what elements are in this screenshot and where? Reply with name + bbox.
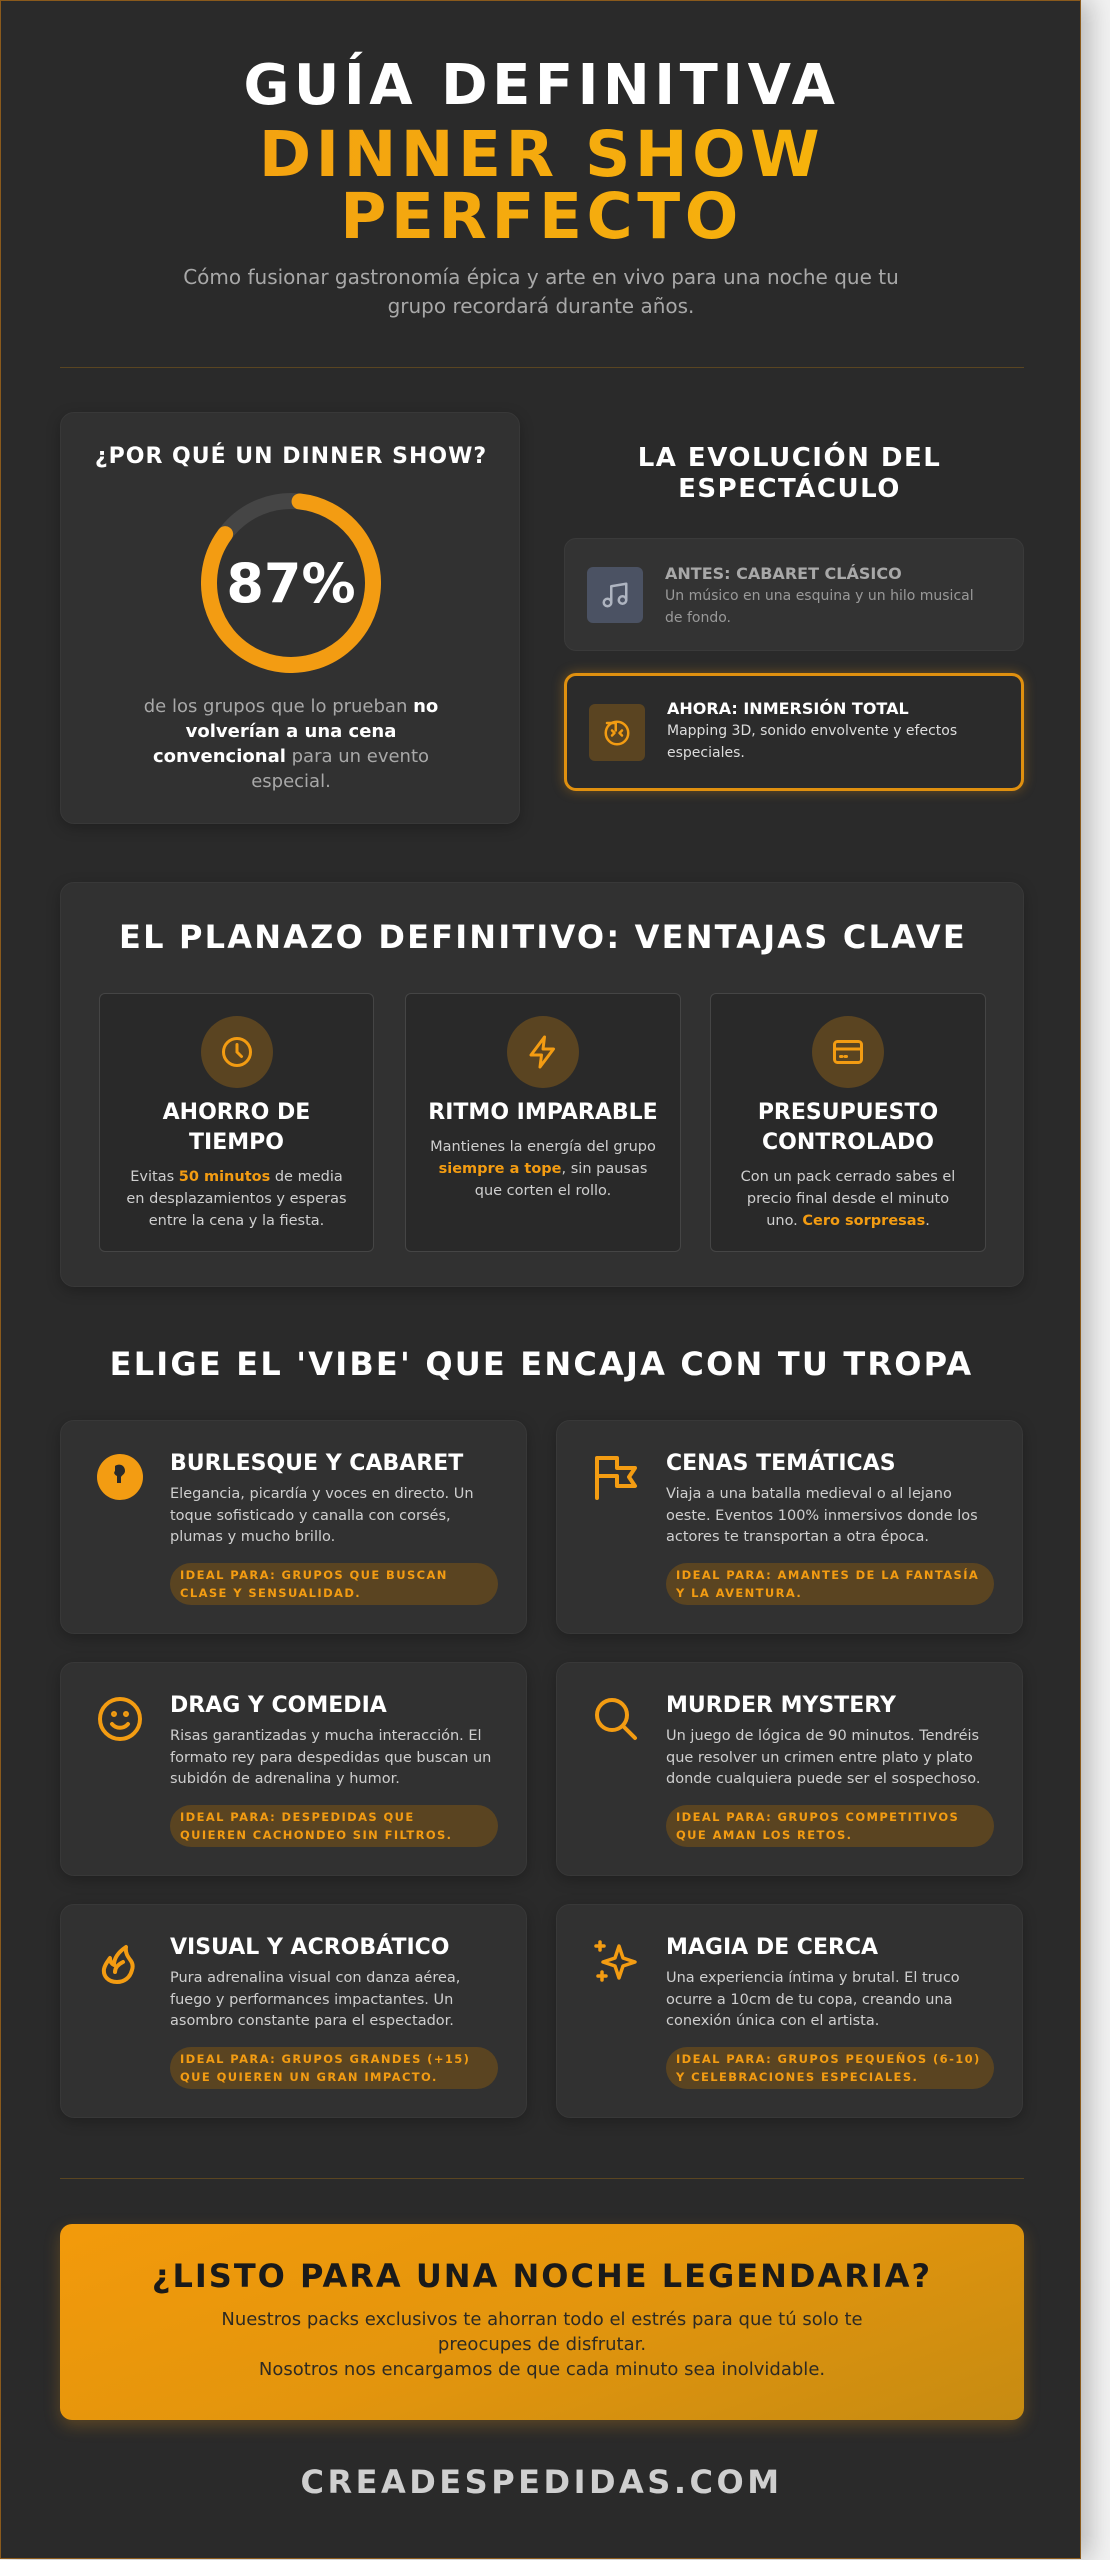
card: drag y comedia bbox=[60, 1662, 527, 1876]
pill: ideal para: IDEAL PARA: GRUPOS COMPETITIVOS bbox=[676, 1810, 959, 1824]
icon: theater bbox=[589, 704, 645, 761]
card: burlesque bbox=[60, 1420, 527, 1634]
card: cenas temáticas: CENAS TEMÁTICAS bbox=[666, 1451, 896, 1476]
pill: ideal para: Y CELEBRACIONES ESPECIALES. bbox=[676, 2070, 918, 2084]
text: antes: Un músico en una esquina y un hilo musical de fondo. bbox=[665, 588, 974, 626]
pill: ideal para bbox=[170, 1805, 498, 1847]
callout: CTA bbox=[60, 2224, 1024, 2420]
card: drag y comedia: Risas garantizadas y mucha interacción. El formato rey para despedidas que buscan un subidón de adrenalina y humor. bbox=[170, 1728, 491, 1787]
title: DINNER SHOW bbox=[259, 118, 824, 191]
CTA text bbox=[221, 2309, 863, 2380]
card: burlesque: BURLESQUE Y CABARET bbox=[170, 1451, 463, 1476]
pill: ideal para: CLASE Y SENSUALIDAD. bbox=[180, 1586, 361, 1600]
title bbox=[243, 52, 840, 253]
icon: music note bbox=[587, 567, 643, 623]
card: magia de cerca: Una experiencia íntima y brutal. El truco ocurre a 10cm de tu copa, creando una conexión única con el artista. bbox=[666, 1970, 960, 2029]
card: presupuesto: PRESUPUESTO bbox=[758, 1100, 938, 1125]
card: visual y acrobático bbox=[60, 1904, 527, 2118]
icon: clock bbox=[200, 1016, 272, 1088]
card: burlesque: Elegancia, picardía y voces en directo. Un toque sofisticado y canalla con corsés, plumas y mucho brillo. bbox=[170, 1486, 474, 1545]
icon: card bbox=[812, 1016, 884, 1088]
CTA text: Nosotros nos encargamos de que cada minuto sea inolvidable. bbox=[259, 2359, 825, 2380]
icon: magnifier bbox=[595, 1698, 638, 1740]
title: GUÍA DEFINITIVA bbox=[243, 53, 840, 118]
donut chart 87% bbox=[201, 493, 381, 673]
text: ahora: AHORA: INMERSIÓN TOTAL bbox=[667, 699, 909, 718]
heading: por qué: ¿POR QUÉ UN DINNER SHOW? bbox=[95, 444, 487, 469]
card: magia de cerca bbox=[556, 1904, 1023, 2118]
card: ritmo imparable: RITMO IMPARABLE bbox=[428, 1100, 658, 1125]
pill: ideal para: IDEAL PARA: DESPEDIDAS QUE bbox=[180, 1810, 415, 1824]
card: ritmo imparable: Mantienes la energía del grupo siempre a tope, sin pausas que corten el rollo. bbox=[430, 1139, 656, 1199]
icon: flag bbox=[595, 1456, 638, 1500]
heading: ventajas: EL PLANAZO DEFINITIVO: VENTAJAS CLAVE bbox=[119, 918, 967, 956]
heading: evolución: ESPECTÁCULO bbox=[678, 474, 901, 504]
card: presupuesto bbox=[710, 993, 986, 1252]
card: cenas temáticas: Viaja a una batalla medieval o al lejano oeste. Eventos 100% inmersivos donde los actores te transportan a otra época. bbox=[666, 1486, 978, 1545]
stat description: de los grupos que lo prueban no volverían a una cena convencional para un evento especial. bbox=[144, 696, 438, 792]
text: ahora: Mapping 3D, sonido envolvente y efectos especiales. bbox=[667, 723, 957, 761]
card: ahorro de tiempo: TIEMPO bbox=[189, 1130, 284, 1155]
pill: ideal para: QUE AMAN LOS RETOS. bbox=[676, 1828, 852, 1842]
icon: mask bbox=[97, 1454, 143, 1500]
pill: ideal para: QUIEREN CACHONDEO SIN FILTROS. bbox=[180, 1828, 452, 1842]
card: drag y comedia: DRAG Y COMEDIA bbox=[170, 1693, 387, 1718]
pill: ideal para: Y LA AVENTURA. bbox=[676, 1586, 802, 1600]
pill: ideal para bbox=[666, 1563, 994, 1605]
card: visual y acrobático: Pura adrenalina visual con danza aérea, fuego y performances impactantes. Un asombro constante para el espectador. bbox=[170, 1970, 460, 2029]
pill: ideal para: IDEAL PARA: GRUPOS GRANDES (+15) bbox=[180, 2052, 470, 2066]
card: murder mystery: Un juego de lógica de 90 minutos. Tendréis que resolver un crimen entre plato y plato donde cualquiera puede ser el sospechoso. bbox=[666, 1728, 980, 1787]
card: ahorro de tiempo: Evitas 50 minutos de media en desplazamientos y esperas entre la cena y la fiesta. bbox=[126, 1169, 347, 1229]
icon: sparkles bbox=[594, 1940, 637, 1982]
pill: ideal para: QUE QUIEREN UN GRAN IMPACTO. bbox=[180, 2070, 438, 2084]
card: antes bbox=[564, 538, 1024, 651]
donut chart 87%: 87% bbox=[226, 552, 356, 615]
icon: smile bbox=[98, 1697, 142, 1741]
heading: evolución: LA EVOLUCIÓN DEL bbox=[638, 443, 941, 473]
pill: ideal para bbox=[170, 1563, 498, 1605]
card: ritmo imparable bbox=[405, 993, 681, 1252]
subtitle: Cómo fusionar gastronomía épica y arte en vivo para una noche que tu grupo recordará durante años. bbox=[183, 265, 899, 318]
card: presupuesto: CONTROLADO bbox=[762, 1130, 934, 1155]
pill: ideal para: IDEAL PARA: GRUPOS QUE BUSCAN bbox=[180, 1568, 448, 1582]
card: magia de cerca: MAGIA DE CERCA bbox=[666, 1935, 878, 1960]
card: ahorro de tiempo bbox=[99, 993, 374, 1252]
card: murder mystery bbox=[556, 1662, 1023, 1876]
heading: vibe: ELIGE EL 'VIBE' QUE ENCAJA CON TU TROPA bbox=[110, 1345, 973, 1383]
card: ahorro de tiempo: AHORRO DE bbox=[163, 1100, 310, 1125]
pill: ideal para bbox=[666, 2047, 994, 2089]
card: murder mystery: MURDER MYSTERY bbox=[666, 1693, 896, 1718]
panel: por qué bbox=[60, 412, 520, 824]
footer brand: CREADESPEDIDAS.COM bbox=[300, 2463, 783, 2501]
card: visual y acrobático: VISUAL Y ACROBÁTICO bbox=[170, 1935, 449, 1960]
pill: ideal para bbox=[666, 1805, 994, 1847]
pill: ideal para bbox=[170, 2047, 498, 2089]
panel: ventajas clave bbox=[60, 882, 1024, 1287]
CTA text: Nuestros packs exclusivos te ahorran todo el estrés para que tú solo te preocupes de disfrutar. bbox=[221, 2309, 863, 2355]
icon: fire bbox=[102, 1944, 135, 1984]
pill: ideal para: IDEAL PARA: AMANTES DE LA FANTASÍA bbox=[676, 1568, 979, 1582]
text: ahora bbox=[667, 698, 957, 761]
card: cenas temáticas bbox=[556, 1420, 1023, 1634]
title: PERFECTO bbox=[340, 180, 743, 253]
CTA heading: ¿LISTO PARA UNA NOCHE LEGENDARIA? bbox=[152, 2257, 932, 2295]
icon: bolt bbox=[507, 1016, 579, 1088]
text: antes: ANTES: CABARET CLÁSICO bbox=[665, 564, 902, 583]
card: ahora bbox=[564, 673, 1024, 791]
text: antes bbox=[665, 564, 974, 626]
heading: evolución bbox=[638, 442, 941, 504]
pill: ideal para: IDEAL PARA: GRUPOS PEQUEÑOS (6-10) bbox=[676, 2052, 981, 2066]
card: presupuesto: Con un pack cerrado sabes el precio final desde el minuto uno. Cero sorpresas. bbox=[741, 1169, 955, 1229]
